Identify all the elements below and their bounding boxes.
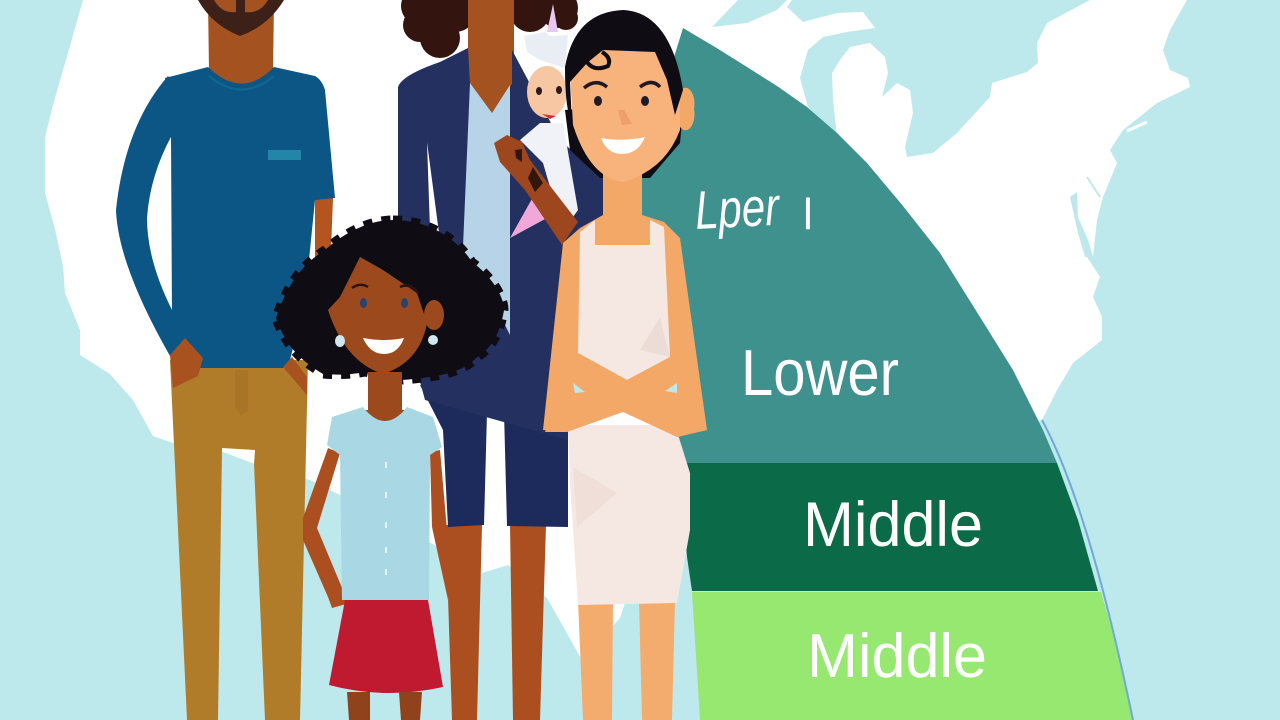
- segment: middle light green: [692, 592, 1133, 720]
- shorts: [420, 385, 568, 527]
- blouse: [327, 407, 442, 600]
- dress upper: [578, 220, 670, 380]
- face: [570, 48, 680, 182]
- dress shadow upper: [640, 317, 670, 357]
- curly hair: [401, 0, 578, 58]
- baby: mouth: [542, 114, 556, 119]
- earrings: [335, 335, 438, 347]
- person: man in blue shirt: [116, 0, 335, 720]
- collar: [209, 76, 274, 90]
- baby: body: [520, 123, 578, 217]
- segment: upper and lower teal: [630, 28, 1057, 463]
- hair behind jaw: [565, 100, 684, 178]
- white lapel gap: [427, 142, 439, 233]
- right arm skin: [315, 198, 333, 262]
- hair: [276, 220, 504, 380]
- brows: [584, 82, 660, 88]
- baby: white hair: [524, 32, 568, 68]
- right arm: [430, 450, 448, 600]
- pyramid edge: [1042, 420, 1133, 720]
- legs: [347, 692, 422, 720]
- dress shadow: [573, 467, 617, 527]
- right ear: [676, 88, 694, 130]
- blazer: [398, 48, 603, 440]
- hair curl: [587, 52, 609, 68]
- left hand: [170, 338, 203, 388]
- hair: [565, 10, 683, 123]
- torso: [165, 67, 335, 368]
- eyes: [360, 298, 408, 308]
- label: Upper: l: [803, 190, 813, 239]
- arm gaps: [573, 383, 677, 393]
- crossed forearms: [545, 353, 707, 437]
- neck: [208, 0, 274, 85]
- right hand: [283, 357, 307, 395]
- nose: [618, 110, 632, 125]
- person: woman in navy blazer holding baby: [398, 0, 603, 720]
- neck: [362, 372, 408, 422]
- blouse: [462, 83, 510, 335]
- legs: [432, 525, 546, 720]
- dress lower: [568, 425, 690, 605]
- woman forearm and hand: [494, 135, 578, 245]
- label: Middle dark band: Middle: [803, 490, 983, 560]
- skirt: [329, 600, 443, 693]
- label: Upper: Lper: [693, 177, 782, 241]
- buttons: [385, 462, 387, 575]
- pyramid: income class segments: [630, 28, 1133, 720]
- cuff marks: [515, 149, 543, 192]
- baby: pink wrap: [510, 197, 547, 238]
- face under beard: [214, 0, 268, 12]
- trouser fly: [235, 370, 248, 415]
- brows: [352, 285, 418, 293]
- baby: bunny ear: [547, 4, 558, 32]
- left arm: [303, 448, 350, 608]
- eyes: [594, 96, 649, 106]
- label: Middle light band: Middle: [807, 622, 987, 691]
- smile: [363, 338, 404, 354]
- segment: middle dark green: [680, 463, 1098, 591]
- label: Lower: Lower: [741, 336, 899, 409]
- left arm: [116, 76, 200, 362]
- beard: [198, 0, 284, 36]
- person: girl in light blue top: [276, 220, 504, 720]
- ear: [424, 300, 444, 330]
- neck and arms: [543, 170, 707, 437]
- baby: head: [527, 66, 567, 118]
- trousers: [170, 360, 308, 720]
- legs: [578, 600, 675, 720]
- smile: [601, 137, 645, 154]
- baby: eyes: [536, 86, 562, 95]
- person: woman in white dress: [543, 10, 707, 720]
- face: [328, 257, 427, 374]
- neck and chest: [468, 0, 514, 115]
- pocket: [268, 150, 301, 160]
